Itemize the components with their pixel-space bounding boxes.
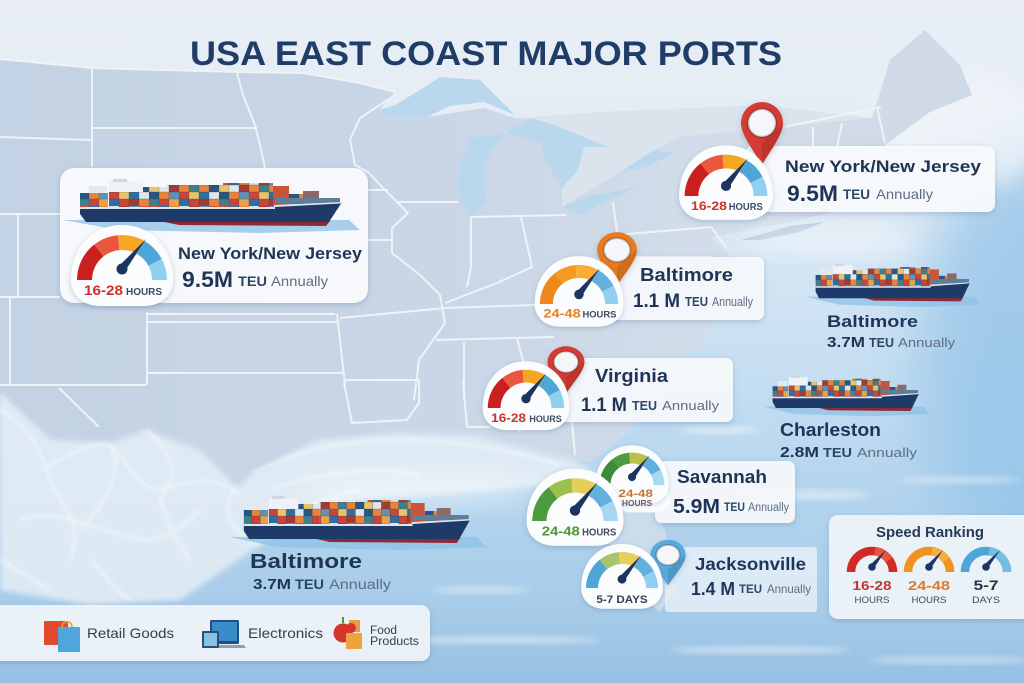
panel: Baltimore ship label xyxy=(806,264,981,351)
great lakes xyxy=(379,77,676,215)
volume xyxy=(780,444,918,461)
speed gauge: 5-7 days: DAYS xyxy=(972,595,1000,606)
volume: TEU xyxy=(843,186,870,202)
label: retail goods: Retail Goods xyxy=(87,625,174,641)
volume xyxy=(787,181,933,206)
volume: Annually xyxy=(748,502,789,514)
panel: Jacksonville marker xyxy=(581,540,817,612)
volume: Annually xyxy=(712,295,754,309)
panel: Virginia marker xyxy=(483,346,733,430)
gauge: HOURS xyxy=(529,414,562,424)
gauge: 16-28 hours xyxy=(71,225,173,306)
gauge: HOURS xyxy=(582,309,616,320)
speed gauge: 5-7 days: 5-7 xyxy=(974,578,998,593)
volume xyxy=(827,334,956,351)
volume: Annually xyxy=(662,398,720,413)
volume: TEU xyxy=(238,273,267,289)
volume: TEU xyxy=(632,398,657,413)
panel: Savannah marker xyxy=(527,445,795,546)
volume: TEU xyxy=(739,582,762,596)
small gauge xyxy=(595,445,669,512)
volume: TEU xyxy=(295,577,324,592)
icon: shopping bags xyxy=(44,621,80,652)
speed gauge: 24-48 hours: HOURS xyxy=(912,595,946,606)
speed gauge: 24-48 hours: 24-48 xyxy=(908,578,950,593)
large gauge: HOURS xyxy=(582,527,617,538)
label: electronics: Electronics xyxy=(248,625,323,641)
gauge: HOURS xyxy=(729,202,763,213)
port name: Jacksonville xyxy=(695,554,806,574)
icon: laptop and tablet xyxy=(202,620,246,648)
volume: 5.9M xyxy=(673,496,720,518)
pin xyxy=(650,540,686,585)
ship illustration xyxy=(63,179,360,233)
volume xyxy=(633,291,754,312)
gauge xyxy=(581,544,663,609)
large gauge: 24-48 xyxy=(542,523,580,538)
volume: TEU xyxy=(869,335,894,350)
volume: TEU xyxy=(724,502,745,514)
gauge: 16-28 hours: HOURS xyxy=(126,286,162,298)
ship illustration xyxy=(229,496,486,550)
gauge: 5-7 DAYS xyxy=(596,594,648,606)
speed gauge: 16-28 hours: 16-28 xyxy=(852,578,892,593)
volume: 1.4 M xyxy=(691,579,735,599)
speed gauge: 16-28 hours xyxy=(851,550,893,606)
panel: Charleston ship label xyxy=(763,376,929,461)
ship illustration xyxy=(763,376,929,416)
port name: Savannah xyxy=(677,467,767,487)
label: food products: Food xyxy=(370,625,397,637)
volume xyxy=(673,496,789,518)
pin xyxy=(597,232,637,286)
state borders xyxy=(0,59,885,455)
label: food products: Products xyxy=(370,636,419,648)
port name: Baltimore xyxy=(827,312,918,331)
panel: New York/New Jersey marker xyxy=(679,102,995,220)
port name: Virginia xyxy=(595,366,669,386)
small gauge: HOURS xyxy=(622,498,652,508)
volume: 2.8M xyxy=(780,444,819,461)
clouds and ocean texture xyxy=(0,228,1024,664)
gauge xyxy=(483,361,569,430)
panel: New York/New Jersey ship card xyxy=(60,168,368,306)
volume: Annually xyxy=(857,445,918,460)
port name: New York/New Jersey xyxy=(178,244,363,263)
pin xyxy=(741,102,783,165)
volume: TEU xyxy=(685,295,708,309)
volume: 1.1 M xyxy=(581,395,627,416)
gauge: 16-28 hours: 16-28 xyxy=(84,282,123,298)
volume: Annually xyxy=(876,186,933,202)
small gauge: 24-48 xyxy=(618,488,653,500)
volume: 3.7M xyxy=(253,576,291,593)
gauge: 16-28 xyxy=(491,411,526,425)
volume: Annually xyxy=(271,273,328,289)
port name: Baltimore xyxy=(250,551,362,573)
volume: 1.1 M xyxy=(633,291,680,312)
pin xyxy=(548,346,584,394)
port name: Charleston xyxy=(780,420,881,440)
icon: apple and produce box xyxy=(334,617,362,649)
volume: 9.5M xyxy=(182,267,233,292)
volume: 3.7M xyxy=(827,334,865,351)
label: food products xyxy=(370,625,419,648)
gauge xyxy=(679,145,773,220)
large gauge xyxy=(527,469,623,546)
volume: TEU xyxy=(823,445,852,460)
volume xyxy=(182,267,328,292)
port name: Baltimore xyxy=(640,265,733,285)
gauge: 24-48 xyxy=(543,306,581,320)
gauge xyxy=(535,256,623,327)
panel: cargo legend xyxy=(0,605,430,661)
speed gauge: 16-28 hours: HOURS xyxy=(854,595,890,606)
volume: Annually xyxy=(898,335,956,350)
volume: Annually xyxy=(329,577,391,592)
panel: Baltimore bottom ship label xyxy=(229,496,486,593)
heading: Speed Ranking xyxy=(876,525,984,541)
volume xyxy=(253,576,391,593)
volume xyxy=(691,579,811,599)
panel: Baltimore marker xyxy=(535,232,764,327)
volume xyxy=(581,395,720,416)
speed gauge: 24-48 hours xyxy=(908,550,950,606)
volume: 9.5M xyxy=(787,181,838,206)
port name: New York/New Jersey xyxy=(785,157,982,176)
ship illustration xyxy=(806,264,981,307)
volume: Annually xyxy=(767,582,811,596)
title: USA EAST COAST MAJOR PORTS xyxy=(190,35,782,73)
speed gauge: 5-7 days xyxy=(965,550,1007,606)
gauge: 16-28 xyxy=(691,199,727,213)
panel: Speed Ranking legend xyxy=(829,515,1024,619)
